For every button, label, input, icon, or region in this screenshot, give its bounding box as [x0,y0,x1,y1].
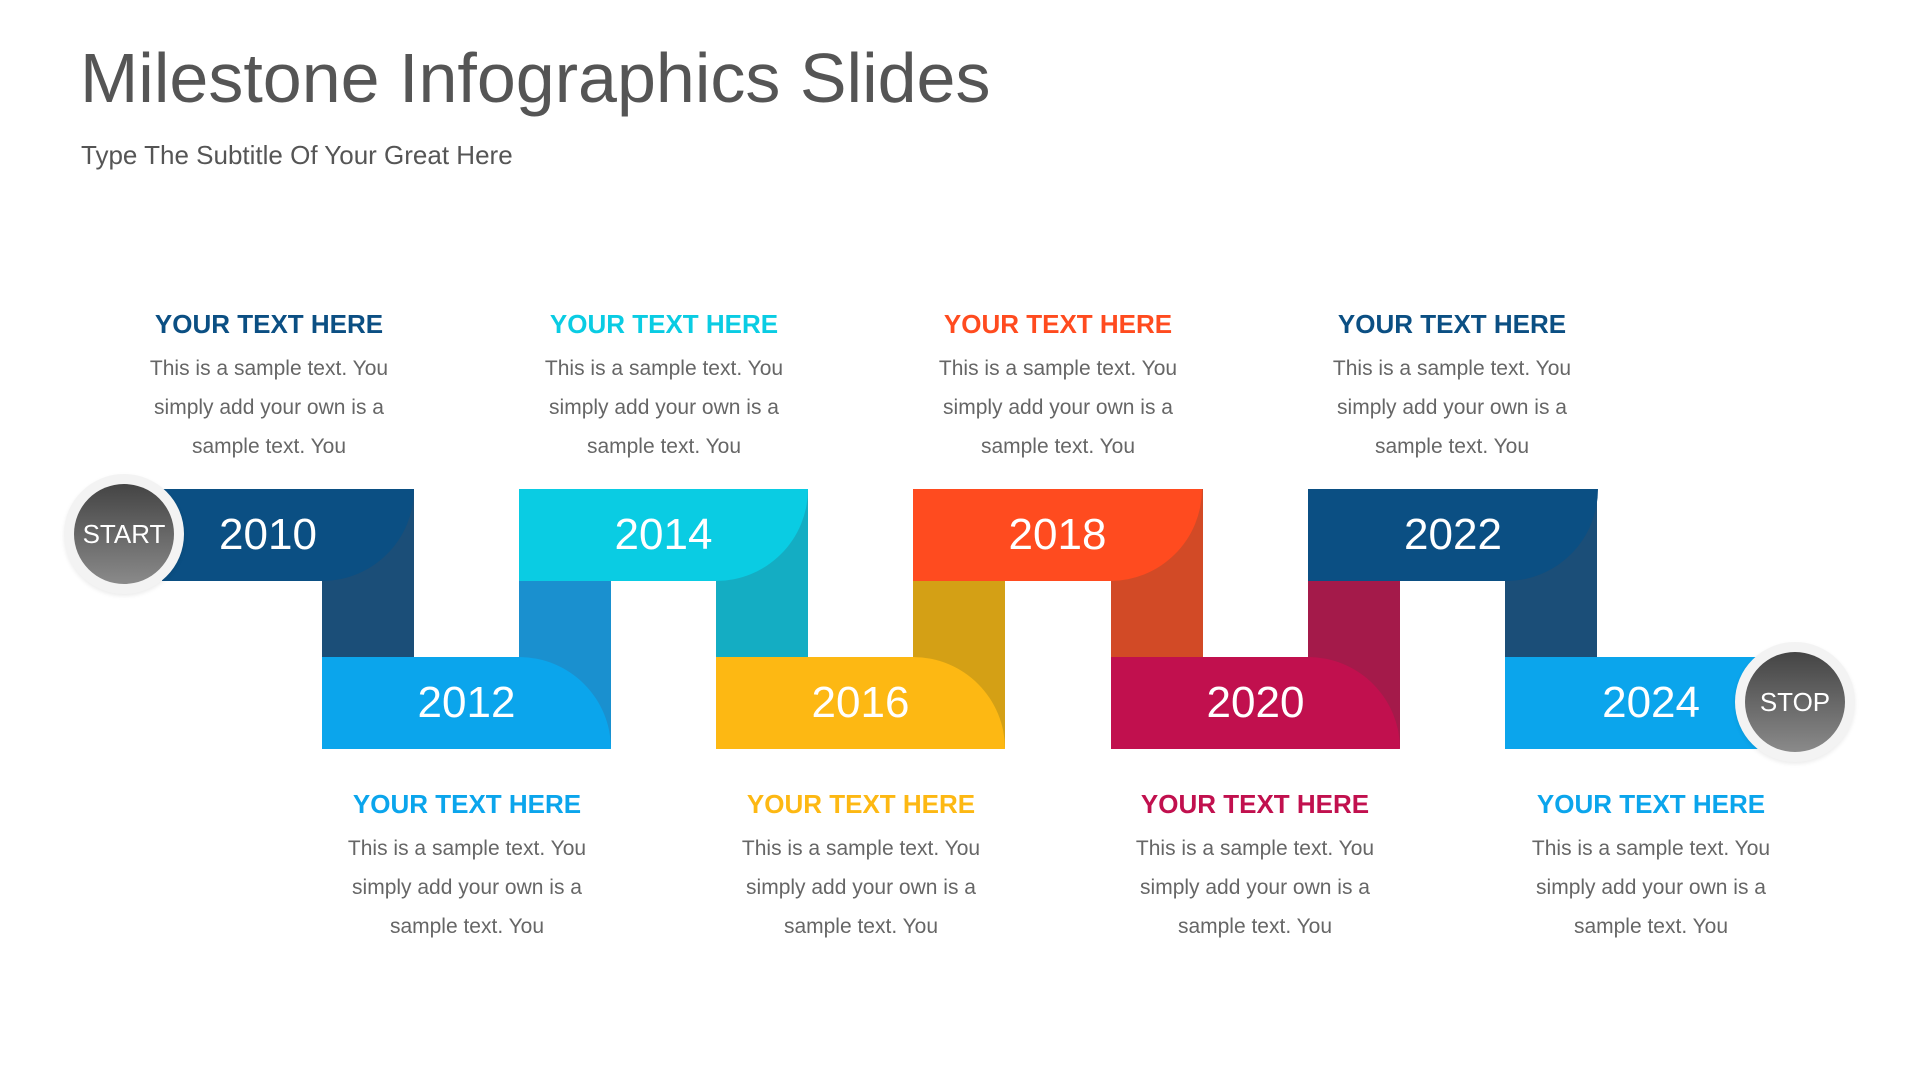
bar 2018 [913,489,1202,581]
text 2016: This is a sample text. You [742,837,980,860]
text 2024: YOUR TEXT HERE [1537,789,1765,819]
text 2018: simply add your own is a [943,396,1173,419]
text 2018: sample text. You [981,435,1135,458]
text 2014: This is a sample text. You [545,357,783,380]
text 2014 [545,309,783,458]
text 2020: YOUR TEXT HERE [1141,789,1369,819]
text 2018: YOUR TEXT HERE [944,309,1172,339]
connector 2014-2016 [716,489,808,657]
text 2012: sample text. You [390,915,544,938]
text 2016 [742,789,980,938]
text 2010 [150,309,388,458]
text 2024 [1532,789,1770,938]
timeline [64,474,1855,764]
text 2012 [348,789,586,938]
text 2016: sample text. You [784,915,938,938]
text 2022: This is a sample text. You [1333,357,1571,380]
bar 2012: 2012 [418,678,515,727]
bar 2024: 2024 [1602,678,1700,727]
connector 2018-2020 [1111,489,1203,657]
bar 2010: 2010 [219,510,317,559]
bar 2020: 2020 [1207,678,1304,727]
bar 2022: 2022 [1404,510,1502,559]
text 2024: simply add your own is a [1536,876,1766,899]
text 2022: simply add your own is a [1337,396,1567,419]
text 2018 [939,309,1177,458]
connector 2016-2018 [913,489,1005,748]
text 2022: sample text. You [1375,435,1529,458]
text 2018: This is a sample text. You [939,357,1177,380]
bar 2022 [1308,489,1598,581]
connector 2012-2014 [519,489,611,748]
text 2020: This is a sample text. You [1136,837,1374,860]
bar 2014: 2014 [615,510,712,559]
bar 2014 [519,489,808,581]
text 2022: YOUR TEXT HERE [1338,309,1566,339]
stop circle: STOP [1760,686,1830,716]
stop circle [1735,642,1855,762]
bar 2012 [322,657,611,749]
text 2016: simply add your own is a [746,876,976,899]
connector 2010-2012 [322,489,414,657]
connector 2020-2022 [1308,489,1400,748]
text 2024: sample text. You [1574,915,1728,938]
text 2012: This is a sample text. You [348,837,586,860]
connector 2022-2024 [1505,489,1597,657]
text 2010: sample text. You [192,435,346,458]
text 2016: YOUR TEXT HERE [747,789,975,819]
bar 2024 [1505,657,1785,749]
bar 2018: 2018 [1009,510,1106,559]
bar 2020 [1111,657,1400,749]
text 2012: YOUR TEXT HERE [353,789,581,819]
text 2010: This is a sample text. You [150,357,388,380]
text 2010: simply add your own is a [154,396,384,419]
text 2010: YOUR TEXT HERE [155,309,383,339]
text 2020: simply add your own is a [1140,876,1370,899]
title: Milestone Infographics Slides [80,39,990,117]
start circle: START [83,518,165,548]
text 2022 [1333,309,1571,458]
subtitle: Type The Subtitle Of Your Great Here [81,140,513,170]
bar 2016: 2016 [812,678,909,727]
text 2014: simply add your own is a [549,396,779,419]
text 2014: YOUR TEXT HERE [550,309,778,339]
bar 2016 [716,657,1005,749]
text 2020: sample text. You [1178,915,1332,938]
text 2024: This is a sample text. You [1532,837,1770,860]
bar 2010 [162,489,414,581]
start circle [64,474,184,594]
text 2014: sample text. You [587,435,741,458]
text 2020 [1136,789,1374,938]
text 2012: simply add your own is a [352,876,582,899]
